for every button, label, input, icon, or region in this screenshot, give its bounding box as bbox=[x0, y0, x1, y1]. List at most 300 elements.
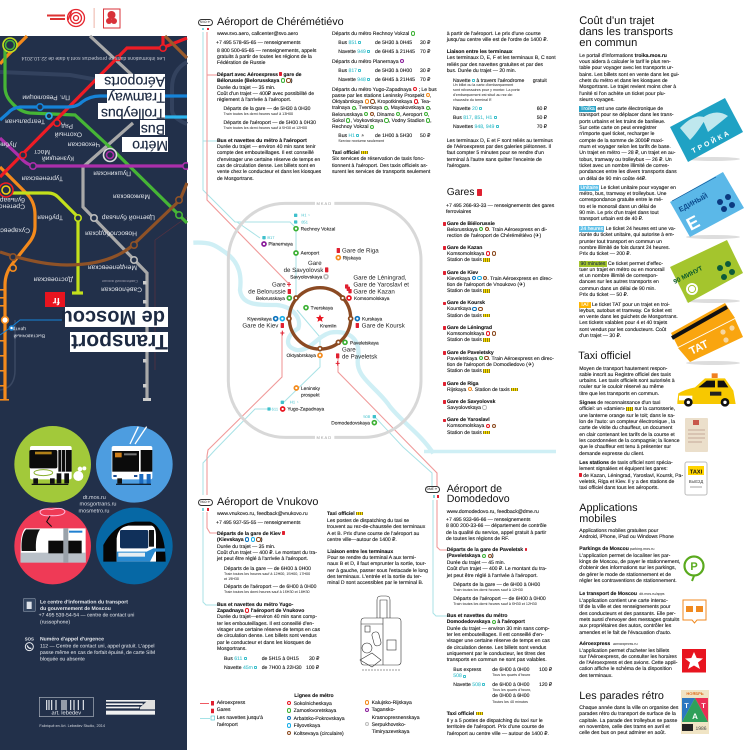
Gare de Kiev: Station de taxis bbox=[447, 288, 482, 294]
Troika ticket text: compte de la somme de 3000₽ maxi- bbox=[579, 138, 664, 144]
Gare de Léningrad: Gare de Léningrad bbox=[447, 325, 492, 331]
contacts: +7 495 937-55-55 — renseignements bbox=[216, 520, 301, 526]
legend heading: Lignes de métro bbox=[294, 692, 334, 698]
metro station labels: Kiyevskaya bbox=[247, 317, 272, 322]
taxi signs: lon de l'auto: un compteur électronique , la bbox=[579, 419, 675, 425]
retro text: celle des bus on peut admirer en août. bbox=[579, 730, 666, 736]
inverted station names: Пл. Революции bbox=[22, 94, 70, 100]
TAT ticket text: TAT Le ticket TAT pour un trajet en troi- bbox=[580, 302, 670, 308]
Aeroexpress routes bbox=[207, 32, 447, 550]
Gare de Léningrad: Komsomolskaya bbox=[447, 331, 484, 337]
departures from Yugo-Zapadnaya: Bus H1 ◔ bbox=[338, 133, 364, 139]
Aeroexpress from Kiev station bbox=[216, 531, 317, 594]
terminal shuttles table: gratuit bbox=[533, 78, 547, 84]
app: Aéroexpress: sur l'Aéroexpress, de consulter les horaires bbox=[579, 654, 677, 660]
bus and shuttles from Domodedovskaya bbox=[446, 613, 550, 663]
terminal shuttles table: 50 ₽ bbox=[537, 115, 547, 121]
Gare de Paveletsky: Gare de Paveletsky bbox=[447, 350, 494, 356]
Gare de Léningrad: Station de taxis bbox=[447, 337, 482, 343]
app: Aéroexpress: Aéroexpress bbox=[579, 641, 610, 647]
24 hours ticket text: 24 heures Le ticket 24 heures est une va- bbox=[580, 226, 675, 232]
panel: official taxi bbox=[570, 346, 675, 492]
railway station labels: de Belorussie bbox=[248, 288, 286, 295]
panel: Sheremetyevo airport bbox=[198, 16, 556, 182]
terminal shuttles table: Navettes 948, 949 bbox=[453, 124, 494, 130]
icon: SOS phone: SOS bbox=[25, 637, 34, 642]
inverted station names bbox=[0, 94, 155, 338]
app: Parkings de Moscou: d'obtenir des informations sur les parkings, bbox=[579, 565, 676, 571]
terminal shuttles table: 60 ₽ bbox=[537, 106, 547, 112]
river band bbox=[424, 450, 556, 453]
departures from Rechnoy Vokzal: 70 ₽ bbox=[420, 49, 430, 55]
link between terminals at Vnukovo: des terminaux. L'entrée et la sortie du ter- bbox=[327, 574, 421, 580]
bus and shuttle section: cas de circulation dense. Les billets sont en bbox=[217, 163, 315, 169]
app: Parkings de Moscou: Parkings de Moscou bbox=[579, 546, 629, 552]
link between terminals at Vnukovo: Liaison entre les terminaux bbox=[327, 549, 393, 555]
Troika ticket text: ticket avec un nombre illimité de corres- bbox=[579, 163, 669, 169]
contacts bbox=[216, 511, 308, 526]
terminal shuttles table: Navette à travers l'aérodrome bbox=[453, 78, 524, 84]
Aeroexpress from Paveletsk station: Train toutes les demi-heures sauf à 6H30 et 12H30 bbox=[453, 602, 537, 606]
contacts: gratuits à partir de toutes les régions de la bbox=[217, 54, 312, 60]
contacts: Fédération de Russie bbox=[217, 60, 265, 66]
Gare de Paveletsky: Station de taxis bbox=[447, 368, 482, 374]
metro station labels: Rechnoy Vokzal bbox=[301, 226, 335, 232]
official taxi at Domodedovo: territoire de l'aéroport. Prix d'une course de bbox=[447, 724, 544, 730]
Gare de Léningrad bbox=[443, 325, 496, 343]
Troika ticket text: n'importe quel ticket, recharger le bbox=[579, 131, 654, 137]
railway station icons bbox=[280, 248, 359, 366]
metro station labels bbox=[247, 226, 390, 426]
text: emergency number: bloquée ou absente bbox=[40, 656, 85, 662]
logo: Moscow crest bbox=[94, 8, 120, 28]
Troika card bbox=[670, 98, 743, 162]
legend first column: Sokolnicheskaya bbox=[294, 700, 332, 706]
official taxi at Sheremetyevo: Taxi officiel bbox=[332, 150, 360, 156]
railway station labels: Gare de Léningrad, bbox=[353, 274, 406, 281]
Gare de Kazan: Station de taxis bbox=[447, 257, 482, 263]
Troika ticket text bbox=[579, 106, 677, 182]
departures from Planernaya: 30 ₽ bbox=[420, 68, 430, 74]
legend first column: Koltsevaya (circulaire) bbox=[294, 730, 344, 736]
Gare de Koursk: Station de taxis bbox=[447, 313, 482, 319]
decorative map background bands bbox=[0, 62, 187, 390]
90 minutes ticket text: tuer un trajet en métro ou en monorail bbox=[579, 267, 665, 273]
Troika ticket text: un délai de 90 min coûte 44₽. bbox=[579, 176, 647, 182]
Gare de Kiev bbox=[443, 270, 552, 294]
bus fare table: Bus express bbox=[453, 667, 481, 673]
icon: green bus bbox=[14, 426, 91, 503]
legend: transport symbols: Aéroexpress bbox=[217, 700, 245, 706]
links: websites: dt.mos.ru bbox=[83, 494, 106, 500]
legend: metro lines bbox=[286, 692, 426, 738]
Gare de Riga: Rijskaya . Station de taxis bbox=[447, 387, 510, 393]
Aeroexpress from Paveletsk station: (Paveletskaya ) bbox=[447, 553, 494, 559]
apps intro: Android, iPhone, iPad ou Windows Phone bbox=[579, 534, 674, 540]
24 hours ticket text: prunter tout transport en commun un bbox=[579, 239, 662, 245]
legend second column: Tagansko- bbox=[372, 707, 395, 713]
Gare de Paveletsky: tion de l'aéroport de Domodiedovo (✈) bbox=[447, 362, 534, 368]
text: emergency number: Numéro d'appel d'urgence bbox=[40, 636, 104, 642]
link between terminals: Les terminaux D, E, F et les terminaux B, C sont bbox=[447, 55, 556, 61]
taxi stations: taxi officiel dans tous les aéroports. bbox=[579, 485, 659, 491]
badge: SVO: SVO ✈ bbox=[200, 20, 210, 24]
official taxi at Sheremetyevo bbox=[332, 150, 430, 175]
icon: SOS phone bbox=[25, 637, 34, 651]
intro text: sieurs voyages. bbox=[579, 97, 615, 103]
legend first column: Arbatsko-Pokrovskaya bbox=[294, 716, 345, 722]
metro station labels: Kurskaya bbox=[362, 317, 382, 322]
Aeroexpress from Kiev station: Train toutes les demi-heures sauf à 16H30 et 18H30 bbox=[224, 590, 310, 594]
Troika card: ТРОЙКА bbox=[690, 128, 732, 155]
inverted station names: Маяковская bbox=[113, 192, 150, 200]
text: fare continuation: jusqu'au centre ville est de l'ordre de 1400 ₽. bbox=[447, 37, 548, 43]
departures from Rechnoy Vokzal: de 5H30 à 0H45 bbox=[375, 40, 412, 46]
taxi intro: sable inscrit au Registre officiel des taxis bbox=[579, 372, 671, 378]
inverted station names: Выставочный bbox=[13, 332, 45, 338]
90 minutes ticket text: commun dans un délai de 90 min. bbox=[579, 286, 656, 292]
Gare de Biélorussie: rection de l'aéroport de Chérémétiévo (✈) bbox=[447, 233, 541, 239]
app: Le transport de Moscou: des conducteurs et des passants. Elle per- bbox=[579, 611, 676, 617]
Unitary ticket text: Unitaire Le ticket unitaire pour voyager en bbox=[580, 185, 676, 191]
shuttle bus tags: 611 bbox=[272, 407, 278, 411]
retro text bbox=[579, 705, 678, 737]
Aeroexpress section: Départ avec Aéroexpress gare de bbox=[217, 72, 302, 78]
text: information centre bbox=[39, 599, 134, 625]
taxi signs: demande expresse du client. bbox=[579, 451, 644, 457]
bus fare table bbox=[224, 656, 320, 670]
app icon: parking: P bbox=[690, 561, 698, 573]
official taxi at Domodedovo: Il y a 5 postes de dispatching du taxi sur le bbox=[447, 718, 543, 724]
Aeroexpress section: Durée du trajet — 35 min. bbox=[217, 84, 275, 90]
panel: Vnukovo airport bbox=[198, 496, 428, 670]
TAT ticket text: leybus, autobus et tramway. Ce ticket est bbox=[579, 308, 672, 314]
bus and shuttles from Yugo-Zapadnaya bbox=[217, 602, 320, 652]
Gare de Kazan: Komsomolskaya bbox=[447, 251, 484, 257]
text: emergency number: passe même en cas de forfait épuisé, de carte SIM bbox=[40, 650, 155, 655]
railway station labels: de Savyolovsk bbox=[284, 266, 324, 273]
app: Le transport de Moscou: L'application contient une carte interac- bbox=[579, 598, 668, 604]
taxi stations: veletsk, Riga et Kiev. Il y a des stations de bbox=[579, 479, 674, 485]
bus fare table: 508 bbox=[453, 673, 462, 679]
link between terminals: bus. Durée du trajet — 20 min. bbox=[447, 68, 516, 74]
text: fare continuation: à partir de l'aéroport. Le prix d'une course bbox=[447, 31, 541, 37]
circle line bbox=[289, 288, 351, 349]
heading: Aéroport de Domodedovo: Domodedovo bbox=[447, 493, 510, 505]
intro text: chets du métro et dans les kiosques de bbox=[579, 78, 668, 84]
apps intro bbox=[579, 528, 674, 541]
bus fare table: de 6H00 à 0H00 bbox=[492, 667, 529, 673]
departures from Rechnoy Vokzal: Navette 949 bbox=[338, 49, 366, 55]
retro parade poster: T bbox=[701, 703, 706, 710]
link between terminals at Vnukovo: Pour se rendre du terminal A aux termi- bbox=[327, 555, 416, 561]
Gare de Kiev: tion de l'aéroport de Vnoukovo (✈) bbox=[447, 282, 525, 288]
link between terminals at Vnukovo: ner à gauche, passer sous l'estacade le long bbox=[327, 568, 428, 574]
intro text: bains. Les billets sont en vente dans les gui- bbox=[579, 72, 679, 78]
shuttle bus tags: B17 bbox=[267, 235, 275, 240]
bus fare table: 100 ₽ bbox=[306, 664, 319, 670]
legend second column: Timiryazevskaya bbox=[372, 729, 409, 735]
Aeroexpress from Kiev station: Durée du trajet — 35 min. bbox=[217, 544, 275, 550]
departures from Rechnoy Vokzal bbox=[332, 31, 430, 55]
panel: cost of a trip bbox=[570, 14, 675, 344]
terminal shuttles table bbox=[453, 78, 547, 130]
Gare de Kiev: Kievskaya . Train Aéroexpress en direc- bbox=[447, 276, 552, 282]
taxi intro: rouler sur le couloir réservé au même bbox=[579, 384, 664, 390]
logo: Mosgortrans bbox=[106, 700, 155, 715]
retro text: Chaque année dans la ville on organise des bbox=[579, 705, 678, 711]
Gare de Yaroslavl: Station de taxis bbox=[447, 430, 482, 436]
legend: transport symbols: l'aéroport bbox=[217, 722, 238, 728]
legend: transport symbols: Gares bbox=[217, 707, 231, 713]
taxi signs bbox=[579, 400, 680, 457]
departures from Rechnoy Vokzal: Bus 851 bbox=[338, 40, 357, 46]
Gare de Kazan bbox=[443, 245, 496, 263]
90 minutes ticket text: dances sur les autres transports en bbox=[579, 279, 659, 285]
heading: Applications mobiles bbox=[579, 503, 638, 524]
legend first column: Filyovskaya bbox=[294, 723, 320, 729]
bus and shuttles from Yugo-Zapadnaya: Bus et navettes du métro Yugo- bbox=[217, 602, 293, 608]
intro text: l'unité si l'on achète un ticket pour plu- bbox=[579, 91, 665, 97]
inverted station names: Ряд bbox=[61, 122, 73, 129]
Gare de Yaroslavl: Komsomolskaya bbox=[447, 423, 484, 429]
Aeroexpress section bbox=[217, 72, 316, 130]
app: Parkings de Moscou bbox=[579, 545, 674, 585]
app: Aéroexpress: cation affiche le schéma de la disposition bbox=[579, 666, 672, 672]
inverted language tag: fr bbox=[53, 295, 60, 306]
metro station labels: Tverskaya bbox=[311, 305, 333, 311]
bus and shuttles from Domodedovskaya: Domodedovskaya à l'aéroport bbox=[447, 619, 525, 625]
inverted station names: центр bbox=[12, 326, 26, 332]
taxi station sign bbox=[685, 462, 707, 495]
taxi intro: Moyen de transport hautement respon- bbox=[579, 366, 667, 372]
bus and shuttles from Domodedovskaya: Bus et navettes du métro bbox=[447, 613, 508, 619]
legend first column: Zamoskvoretskaya bbox=[294, 708, 336, 714]
text: information centre: du gouvernement de Moscou bbox=[40, 606, 111, 611]
departures from Rechnoy Vokzal: Départs du métro Rechnoy Vokzal bbox=[332, 31, 409, 37]
text: Aeroexpress terminal connection bbox=[446, 138, 553, 169]
app: Le transport de Moscou: amendes et le fait de l'évacuation d'auto. bbox=[579, 630, 671, 636]
Gare de Paveletsky bbox=[443, 350, 554, 374]
MKAD ring road: MKAD bbox=[317, 435, 332, 440]
icon: blue metro train bbox=[96, 508, 173, 584]
intro text bbox=[579, 53, 679, 103]
Aeroexpress section: Coût d'un trajet — 400₽ avec possibilité de bbox=[217, 91, 314, 97]
Troika ticket text: tobus, tramway ou trolleybus — 26 ₽. Un bbox=[579, 157, 672, 163]
Gare de Yaroslavl bbox=[443, 417, 496, 436]
inverted list: Métro Bus Trolleybus Tramway Aéroports: Bus bbox=[141, 122, 165, 138]
official taxi at Vnukovo: Taxi officiel bbox=[327, 511, 355, 517]
bus fare table: 30 ₽ bbox=[309, 656, 319, 662]
legend first column bbox=[286, 700, 345, 738]
bus and shuttle section: Durée du trajet — environ 40 min sans tenir bbox=[217, 144, 316, 150]
intro text: vous aidera à calculer le tarif le plus ren- bbox=[579, 59, 671, 65]
Troika ticket text: pondances entre les divers transports dans bbox=[579, 169, 677, 175]
intro text: Mosgortrans. Le trajet revient moins cher à bbox=[579, 84, 676, 90]
link between terminals: reliés par des navettes gratuites et par des bbox=[447, 62, 543, 68]
contacts: +7 495 933-66-66 — renseignements bbox=[446, 517, 531, 523]
inverted date note: Les informations dans ce prospectus sont à date de 22.10.2014 bbox=[21, 55, 165, 61]
inverted station names: Достоевская bbox=[33, 276, 73, 282]
official taxi at Sheremetyevo: tionnent à l'aéroport. Des taxis officiels as- bbox=[332, 163, 427, 169]
river bbox=[193, 243, 433, 453]
metro station labels: Kremlin bbox=[320, 323, 336, 329]
Aeroexpress from Kiev station: Départs de l'aéroport — de 6H00 à 0H00 bbox=[224, 584, 316, 590]
metro station labels: Komsomolskaya bbox=[354, 296, 390, 301]
apps intro: Applications mobiles gratuites pour bbox=[579, 528, 658, 534]
app: Parkings de Moscou: régler les contraventions de stationnement. bbox=[579, 578, 677, 584]
Unitary ticket text: correspondance gratuite entre le mé- bbox=[579, 197, 663, 203]
Troika ticket text: Un trajet en métro — 28 ₽, un trajet en au- bbox=[579, 150, 675, 156]
app: Parkings de Moscou: kings de Moscou, de payer le stationnement, bbox=[579, 559, 680, 565]
inverted list: Métro Bus Trolleybus Tramway Aéroports: Trolleybus bbox=[101, 106, 165, 122]
TAT ticket text bbox=[579, 302, 678, 339]
departures from Yugo-Zapadnaya: Belorusskaya , Dinamo , Aeroport , bbox=[332, 112, 429, 118]
icon: blue trolleybus bbox=[96, 426, 173, 503]
stations and interchanges bbox=[0, 38, 189, 401]
TAT ticket card bbox=[671, 303, 743, 365]
Unitary ticket text: tro et le monorail dans un délai de bbox=[579, 204, 656, 210]
text: station enquiries bbox=[446, 203, 554, 215]
railway station labels: de Paveletsk bbox=[342, 353, 378, 360]
Aeroexpress section: Départs de la gare — de 5H30 à 0H30 bbox=[224, 106, 310, 112]
Aeroexpress from Kiev station: Train toutes les heures sauf à 12H00, 15H00, 17H00 bbox=[224, 572, 310, 576]
Gare de Riga bbox=[443, 380, 518, 393]
Kremlin star bbox=[316, 314, 324, 322]
inverted station names: Цветной бульвар bbox=[102, 214, 155, 220]
Aeroexpress from Kiev station: (Kievskaya ) bbox=[217, 537, 262, 543]
inverted station names: Кузнецкий bbox=[42, 154, 74, 162]
bus and shuttles from Domodedovskaya: visager une certaine réserve de temps en cas bbox=[447, 638, 550, 644]
app: Aéroexpress bbox=[579, 640, 674, 680]
terminal shuttles table: Un billet ou la carte d'embarquement bbox=[453, 83, 513, 87]
inverted heading: Transport de Moscou: de Moscou bbox=[61, 306, 165, 328]
heading: Aéroport de Vnukovo: Aéroport de Vnukovo bbox=[217, 496, 318, 508]
bus and shuttles from Domodedovskaya: ter les embouteillages. Il est conseillé d'en- bbox=[447, 632, 544, 638]
bus and shuttle section: vente chez le conducteur et dans les kiosques bbox=[217, 169, 321, 175]
badge: DME: DME ✈ bbox=[427, 487, 437, 491]
app: Parkings de Moscou: de gérer le mode de stationnement et de bbox=[579, 572, 671, 578]
Aeroexpress from Paveletsk station bbox=[446, 547, 547, 606]
inverted heading: Transport de Moscou bbox=[61, 306, 168, 353]
24 hours ticket text: Prix du ticket — 200 ₽. bbox=[579, 251, 631, 257]
taxi signs: une lanterne orange sur le toit; dans le sa- bbox=[579, 413, 675, 419]
app: Le transport de Moscou: dit.mos.ru/apps bbox=[639, 592, 665, 596]
bus and shuttles from Yugo-Zapadnaya: par le conducteur et dans les kiosques de bbox=[217, 640, 311, 646]
retro parade poster: T bbox=[684, 703, 689, 710]
railway station labels: Gare bbox=[272, 281, 286, 288]
heading: Applications mobiles: mobiles bbox=[579, 513, 617, 525]
app: Le transport de Moscou: mets aussi d'envoyer des messages gratuits bbox=[579, 617, 679, 623]
credit: Fabriqué en Art. Lebedev Studio, 2014 bbox=[39, 724, 105, 728]
departures from Yugo-Zapadnaya: Rechnoy Vokzal bbox=[332, 124, 369, 130]
Aeroexpress from Paveletsk station: Coût d'un trajet — 400 ₽. Le montant du tra- bbox=[447, 566, 547, 572]
Gare de Paveletsky: Paveletskaya . Train Aéroexpress en direc- bbox=[447, 356, 554, 362]
text: emergency number bbox=[40, 636, 155, 662]
bus and shuttles from Domodedovskaya: Durée du trajet — environ 30 min sans comp- bbox=[447, 626, 549, 632]
text: station enquiries: +7 495 266-93-33 — renseignements des gares bbox=[446, 203, 554, 209]
intro text: Le portail d'informations troika.mos.ru bbox=[579, 53, 667, 59]
official taxi at Vnukovo: centre ville—autour de 1400 ₽. bbox=[327, 537, 397, 543]
heading: Aéroport de Domodedovo: Aéroport de bbox=[447, 483, 502, 495]
retro parade poster bbox=[681, 690, 709, 734]
railway station labels: Gare de Riga bbox=[342, 247, 379, 254]
intro text: table pour voyager avec les transports ur- bbox=[579, 65, 673, 71]
Aeroexpress from Kiev station: Départs de la gare — de 6H00 à 0H00 bbox=[224, 566, 311, 572]
Gare de Biélorussie: Gare de Biélorussie bbox=[447, 220, 495, 226]
bus fare table: de 6H00 à 0H00 bbox=[492, 682, 529, 688]
MKAD ring road: MKAD bbox=[317, 201, 332, 206]
contacts: 8 800 200-33-66 — département de contrôle bbox=[446, 523, 547, 529]
railway station labels: Gare de Koursk bbox=[362, 322, 405, 329]
Aeroexpress from Kiev station: Coût d'un trajet — 400 ₽. Le montant du tra- bbox=[217, 550, 317, 556]
bus fare table: de 0H00 à 6H00 bbox=[492, 693, 529, 699]
heading: Coût d'un trajet bbox=[579, 16, 673, 49]
terminal shuttles table: Bus 817, 851, H1 bbox=[453, 115, 492, 121]
Gare de Kazan: Gare de Kazan bbox=[447, 245, 482, 251]
retro text: capitale. La parade des trolleybus se passe bbox=[579, 718, 677, 724]
metro station labels: Belorusskaya bbox=[256, 296, 285, 301]
90 minutes ticket card: 90 МИНУТ bbox=[672, 265, 704, 286]
Gare de Koursk: Kourskaya bbox=[447, 306, 471, 312]
inverted station names: Новослободская bbox=[85, 230, 137, 236]
taxi stations: Les stations de taxis officiel sont spécia- bbox=[579, 460, 673, 466]
Aeroexpress section: Départs de l'aéroport — de 5H00 à 0H30 bbox=[224, 120, 316, 126]
Troika ticket text: ports urbains et les trains de banlieue. bbox=[579, 119, 665, 125]
terminal shuttles table: Navette 20 bbox=[453, 106, 478, 112]
departures from Planernaya bbox=[332, 59, 430, 82]
departures from Planernaya: Bus 817 bbox=[338, 68, 357, 74]
app: Aéroexpress: aeroexpress.ru bbox=[613, 642, 638, 646]
taxi stations: de Kazan, Léningrad, Yaroslavl, Koursk, Pa- bbox=[583, 473, 683, 479]
taxi signs: Signes de reconnaissance d'un taxi bbox=[579, 400, 660, 406]
departures from Yugo-Zapadnaya: Oktyabrskaya , Kropotkinskaya , Tea- bbox=[332, 99, 431, 105]
official taxi at Domodedovo bbox=[447, 711, 547, 738]
taxi signs: les coordonnées de la compagnie; la licence bbox=[579, 438, 680, 444]
legend second column: Kalujsko-Rijskaya bbox=[372, 700, 412, 706]
railway station labels bbox=[242, 247, 409, 360]
terminal shuttles table: chaussée du terminal E bbox=[453, 98, 492, 102]
inverted heading: Transport de Moscou: Transport bbox=[71, 330, 168, 353]
contacts bbox=[446, 509, 547, 542]
Aeroexpress from Paveletsk station: jet peut être réglé à l'arrivée à l'aéroport. bbox=[447, 573, 538, 579]
taxi intro: titre que les transports en commun. bbox=[579, 391, 659, 397]
24 hours ticket text: nombre illimité de fois durant 24 heures. bbox=[579, 245, 670, 251]
app: Aéroexpress: des terminaux. bbox=[579, 673, 613, 679]
link between terminals: Liaison entre les terminaux bbox=[447, 49, 513, 55]
departures from Rechnoy Vokzal: de 6H45 à 21H45 bbox=[375, 49, 415, 55]
panel: mobile applications bbox=[570, 498, 675, 683]
bus and shuttles from Yugo-Zapadnaya: ter les embouteillages. Il est conseillé d'en- bbox=[217, 621, 314, 627]
90 minutes ticket text bbox=[579, 260, 665, 298]
text: information centre: Le centre d'information du transport bbox=[40, 599, 128, 605]
Gare de Riga: Gare de Riga bbox=[447, 380, 478, 386]
TAT ticket card: TAT bbox=[687, 338, 711, 358]
inverted station names: Театральная bbox=[5, 118, 45, 124]
text: Aeroexpress terminal connection: faut compter 5 minutes pour se rendre d'un bbox=[447, 150, 544, 156]
contacts: www.domodedovo.ru, feedback@dme.ru bbox=[447, 509, 539, 515]
Aeroexpress from Paveletsk station: Départs de l'aéroport — de 6H00 à 0H00 bbox=[453, 596, 546, 602]
logo: art lebedev bbox=[39, 697, 93, 717]
heading: Taxi officiel: Taxi officiel bbox=[578, 350, 631, 362]
bus fare table: Navette 508 bbox=[453, 682, 481, 688]
Unitary ticket card: ЕДИНЫЙ bbox=[677, 191, 709, 214]
official taxi at Domodedovo: l'aéroport au centre ville — autour de 1400 ₽. bbox=[447, 731, 549, 737]
legend second column: Serpukhovsko- bbox=[372, 722, 406, 728]
suitcase illustration bbox=[360, 596, 401, 670]
station markers bbox=[262, 227, 376, 425]
text: information centre: (russophone) bbox=[40, 619, 70, 625]
